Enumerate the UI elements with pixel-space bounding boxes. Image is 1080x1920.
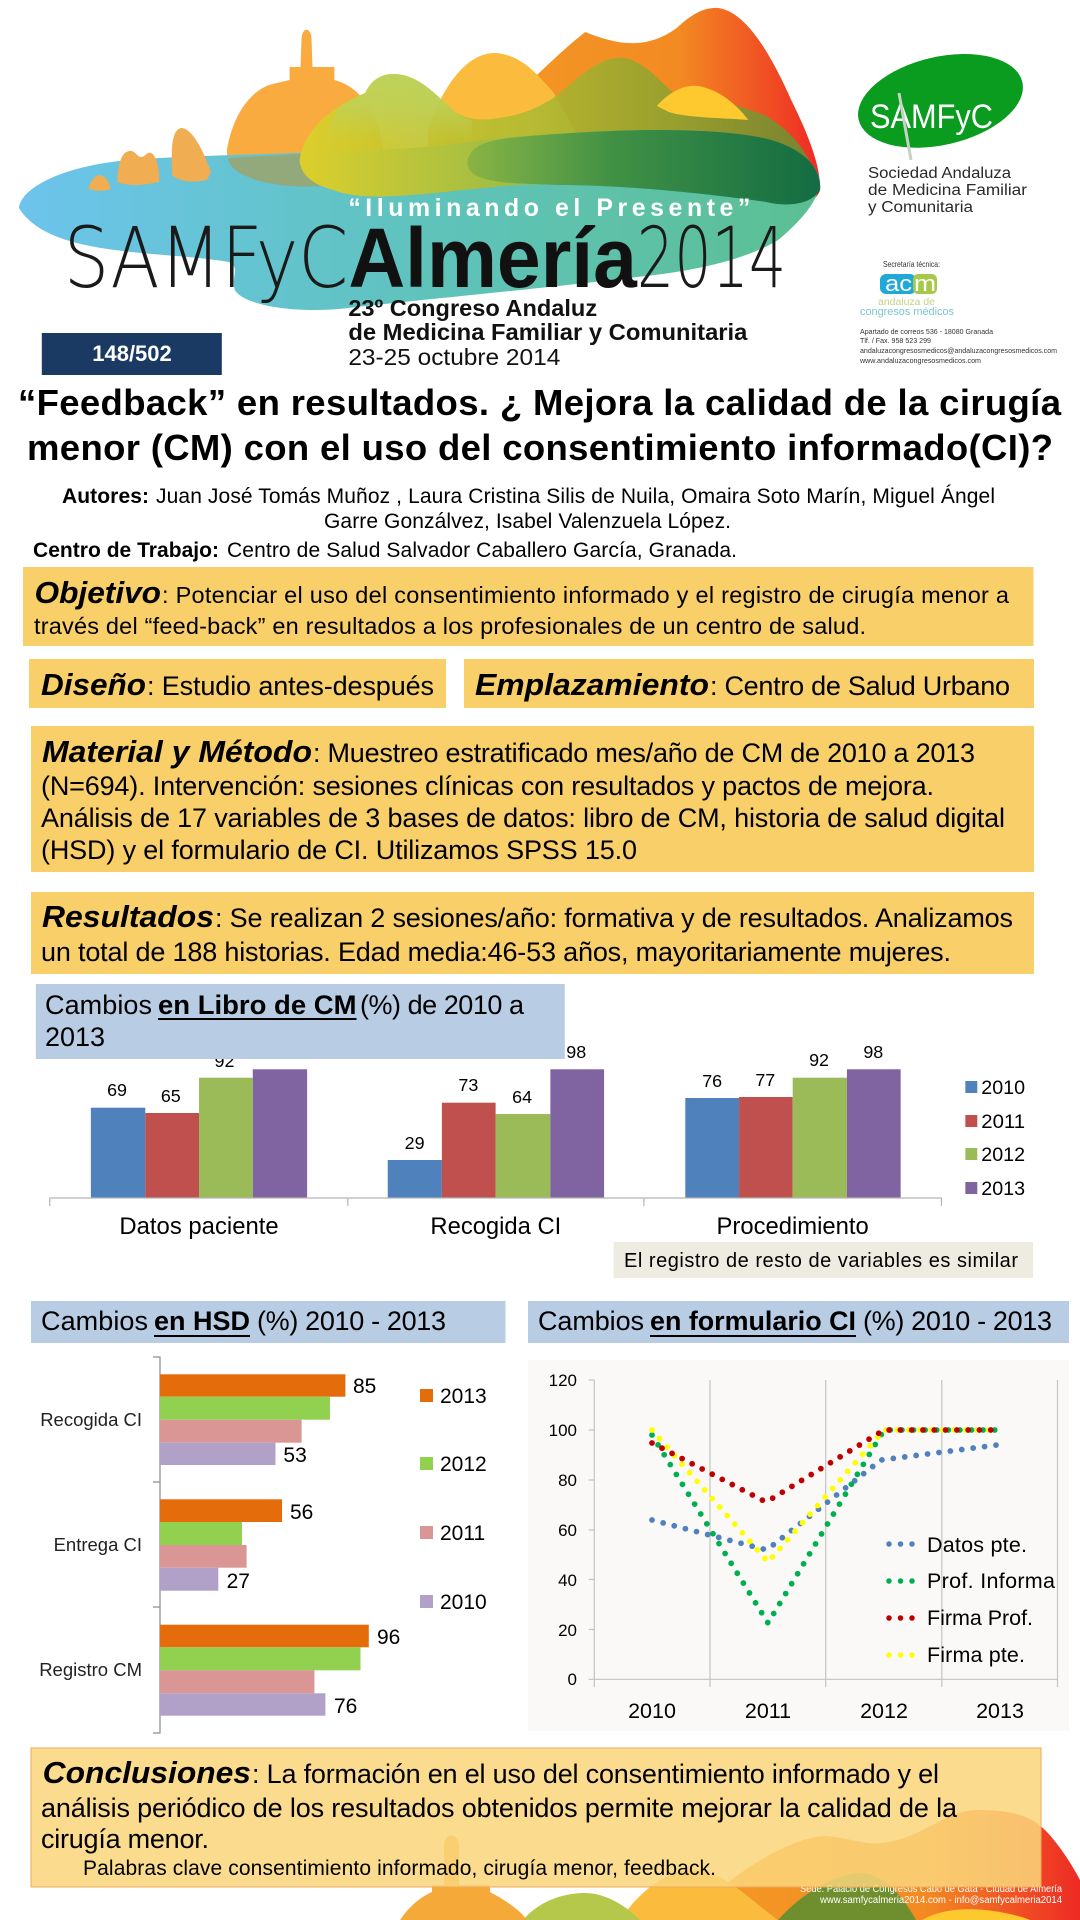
panel: emplazamiento <box>464 659 1034 708</box>
congress name: de Medicina Familiar y Comunitaria <box>348 319 748 345</box>
bars: procedimiento: 92 <box>809 1050 829 1070</box>
heading: cambios en HSD: en HSD <box>154 1306 250 1336</box>
workplace: Centro de Salud Salvador Caballero García, Granada. <box>227 539 737 562</box>
heading: cambios en libro de CM: 2013 <box>45 1022 105 1052</box>
heading: cambios en formulario CI: en formulario CI <box>650 1306 856 1336</box>
authors: Garre Gonzálvez, Isabel Valenzuela López. <box>324 510 731 533</box>
light green hilltop <box>323 74 472 140</box>
panel: material y metodo: : Muestreo estratificado mes/año de CM de 2010 a 2013 <box>313 738 975 768</box>
legend: 2012 <box>440 1453 487 1476</box>
y axis labels: 120 <box>549 1371 577 1390</box>
header: congress logo <box>19 8 820 370</box>
panel: conclusiones: : La formación en el uso del consentimiento informado y el <box>252 1759 939 1789</box>
legend: 2013 <box>981 1178 1025 1200</box>
heading: cambios en libro de CM: Cambios <box>45 990 152 1020</box>
bars: datos paciente <box>91 1051 307 1198</box>
authors: Juan José Tomás Muñoz , Laura Cristina Silis de Nuila, Omaira Soto Marín, Miguel Ángel <box>156 485 995 508</box>
workplace: Centro de Trabajo: <box>33 539 219 562</box>
bar chart: HSD <box>39 1357 487 1733</box>
slogan: “Iluminando el Presente” <box>348 194 750 222</box>
legend: 2013 <box>440 1385 487 1408</box>
panel: material y metodo <box>31 726 1034 872</box>
secretaria tecnica block: andaluzacongresosmedicos@andaluzacongresosmedicos.com <box>860 346 1057 355</box>
category labels: Recogida CI <box>40 1409 142 1430</box>
footer decoration: congress landscape <box>400 1810 1080 1920</box>
heading: cambios en libro de CM: en Libro de CM <box>158 990 356 1020</box>
legend: Datos pte. <box>927 1533 1027 1557</box>
category labels <box>39 1409 142 1680</box>
bars: datos paciente: 69 <box>107 1080 127 1100</box>
castle hill <box>227 30 388 185</box>
y axis labels: 80 <box>558 1471 577 1490</box>
yellow-orange hump <box>428 53 597 170</box>
bars: recogida CI <box>388 1042 604 1198</box>
bars: recogida CI: 64 <box>512 1087 532 1107</box>
congress name: 23-25 octubre 2014 <box>348 344 561 370</box>
legend: 2011 <box>440 1522 485 1545</box>
panel: resultados: un total de 188 historias. Edad media:46-53 años, mayoritariamente mujeres. <box>41 937 951 967</box>
congress name: 23º Congreso Andaluz <box>348 295 597 321</box>
footer venue text <box>800 1884 1062 1906</box>
panel: resultados: : Se realizan 2 sesiones/año: formativa y de resultados. Analizamos <box>215 903 1013 933</box>
panel: diseno <box>29 659 446 708</box>
authors <box>62 485 995 533</box>
panel: conclusiones: Palabras clave consentimiento informado, cirugía menor, feedback. <box>83 1857 716 1880</box>
secretaria tecnica block: andaluza de <box>878 297 935 308</box>
y axis labels: 40 <box>558 1571 577 1590</box>
panel: material y metodo: Análisis de 17 variables de 3 bases de datos: libro de CM, historia de salud digital <box>41 803 1005 833</box>
legend <box>965 1077 1025 1200</box>
panel: conclusiones: análisis periódico de los resultados obtenidos permite mejorar la calidad de la <box>41 1793 958 1823</box>
line chart: formulario CI <box>528 1360 1069 1731</box>
panel: diseno: : Estudio antes-después <box>147 671 434 701</box>
x axis labels <box>628 1699 1024 1723</box>
bars: recogida CI <box>160 1374 376 1467</box>
bars: datos paciente: 92 <box>215 1051 234 1071</box>
x axis labels: 2012 <box>860 1699 908 1723</box>
bars: recogida CI: 73 <box>458 1075 478 1095</box>
panel: objetivo: través del “feed-back” en resultados a los profesionales de un centro de salud. <box>34 613 866 639</box>
note: resto de variables: El registro de resto de variables es similar <box>624 1250 1018 1272</box>
series: datos pte <box>652 1445 997 1549</box>
category labels: Procedimiento <box>717 1213 869 1240</box>
yellow peak <box>657 86 748 120</box>
panel: conclusiones: Conclusiones <box>43 1755 251 1790</box>
bars: entrega CI: 27 <box>227 1570 250 1593</box>
abstract number badge <box>42 333 222 375</box>
note: resto de variables <box>614 1242 1033 1278</box>
bars: procedimiento: 76 <box>702 1071 722 1091</box>
authors: Autores: <box>62 485 149 508</box>
x axis labels: 2010 <box>628 1699 676 1723</box>
panel: conclusiones <box>31 1748 1041 1887</box>
bars: procedimiento <box>685 1042 901 1198</box>
category labels: Recogida CI <box>430 1213 561 1240</box>
legend: Firma Prof. <box>927 1606 1033 1630</box>
legend <box>420 1385 487 1614</box>
bars: datos paciente: 65 <box>161 1086 181 1106</box>
SAMFyC society logo: de Medicina Familiar <box>868 182 1027 199</box>
heading: cambios en HSD: Cambios <box>41 1306 148 1336</box>
heading: cambios en formulario CI: (%) 2010 - 2013 <box>863 1306 1052 1336</box>
bars: recogida CI: 85 <box>353 1375 376 1398</box>
bars: entrega CI <box>160 1499 313 1593</box>
bar chart: libro de CM <box>50 1042 1025 1240</box>
y axis labels: 100 <box>549 1421 577 1440</box>
bars: registro CM: 76 <box>334 1695 357 1718</box>
lake <box>19 130 820 310</box>
panel: material y metodo: (HSD) y el formulario de CI. Utilizamos SPSS 15.0 <box>41 835 637 865</box>
panel: emplazamiento: : Centro de Salud Urbano <box>710 671 1010 701</box>
legend: 2011 <box>981 1111 1025 1133</box>
secretaria tecnica block <box>859 260 1057 365</box>
heading: cambios en HSD <box>31 1301 506 1343</box>
bars: procedimiento: 77 <box>755 1070 775 1090</box>
x axis labels: 2013 <box>976 1699 1024 1723</box>
panel: resultados <box>31 892 1034 974</box>
bars: registro CM <box>160 1625 400 1718</box>
dark green band <box>467 130 820 204</box>
panel: conclusiones: cirugía menor. <box>41 1824 209 1854</box>
secretaria tecnica block: Apartado de correos 536 - 18080 Granada <box>860 327 994 336</box>
heading: cambios en formulario CI: Cambios <box>538 1306 644 1336</box>
SAMFyC society logo: SAMFyC <box>870 98 993 136</box>
bars: recogida CI: 29 <box>405 1133 425 1153</box>
panel: emplazamiento: Emplazamiento <box>475 667 709 702</box>
series: firma pte <box>652 1430 997 1562</box>
panel: resultados: Resultados <box>42 899 214 934</box>
SAMFyC wordmark: SAMFyC <box>64 209 348 307</box>
heading: cambios en libro de CM <box>36 984 565 1059</box>
congress name <box>348 295 748 370</box>
SAMFyC society logo: y Comunitaria <box>868 199 973 216</box>
SAMFyC society logo <box>849 39 1032 216</box>
secretaria tecnica block: congresos médicos <box>860 306 954 318</box>
bars: procedimiento: 98 <box>863 1042 883 1062</box>
title: menor (CM) con el uso del consentimiento informado(CI)? <box>27 427 1053 468</box>
series: firma prof <box>652 1430 997 1501</box>
title <box>18 382 1062 468</box>
legend: Firma pte. <box>927 1643 1025 1667</box>
legend: 2010 <box>981 1077 1025 1099</box>
panel: objetivo: Objetivo <box>34 575 161 610</box>
abstract number badge: 148/502 <box>92 341 172 366</box>
panel: material y metodo: Material y Método <box>42 734 312 769</box>
green blob <box>300 58 816 202</box>
y axis labels: 0 <box>568 1670 577 1689</box>
castle reflection over lake <box>228 153 323 187</box>
bars: entrega CI: 56 <box>290 1501 313 1524</box>
category labels <box>119 1213 869 1240</box>
category labels: Datos paciente <box>119 1213 279 1240</box>
series: prof informa <box>652 1430 997 1623</box>
y axis labels: 20 <box>558 1621 577 1640</box>
legend: Prof. Informa <box>927 1569 1055 1593</box>
rocks <box>89 128 211 191</box>
bars: registro CM: 96 <box>377 1626 400 1649</box>
footer venue text: www.samfycalmeria2014.com - info@samfycalmeria2014 <box>819 1895 1062 1906</box>
Almería wordmark: Almería <box>348 211 638 305</box>
x axis labels: 2011 <box>745 1699 791 1723</box>
legend: 2010 <box>440 1591 487 1614</box>
secretaria tecnica block: ac <box>885 271 912 296</box>
y axis labels: 60 <box>558 1521 577 1540</box>
panel: material y metodo: (N=694). Intervención: sesiones clínicas con resultados y pactos de mejora. <box>41 771 934 801</box>
red-orange mountain <box>468 8 820 203</box>
SAMFyC society logo: Sociedad Andaluza <box>868 165 1011 182</box>
legend: 2012 <box>981 1144 1025 1166</box>
panel: objetivo <box>23 567 1034 646</box>
category labels: Registro CM <box>39 1659 142 1680</box>
heading: cambios en HSD: (%) 2010 - 2013 <box>257 1306 446 1336</box>
heading: cambios en libro de CM: (%) de 2010 a <box>360 990 525 1020</box>
secretaria tecnica block: Secretaría técnica: <box>883 260 940 269</box>
2014 wordmark: 2014 <box>637 209 786 307</box>
panel: diseno: Diseño <box>41 667 146 702</box>
secretaria tecnica block: m <box>914 271 936 296</box>
panel: objetivo: : Potenciar el uso del consentimiento informado y el registro de cirugía menor a <box>162 582 1010 608</box>
secretaria tecnica block: www.andaluzacongresosmedicos.com <box>859 356 981 365</box>
y axis labels <box>549 1371 577 1689</box>
category labels: Entrega CI <box>54 1534 142 1555</box>
secretaria tecnica block: Tlf. / Fax. 958 523 299 <box>860 336 931 345</box>
bars: recogida CI: 98 <box>566 1042 586 1062</box>
title: “Feedback” en resultados. ¿ Mejora la calidad de la cirugía <box>18 382 1062 423</box>
heading: cambios en formulario CI <box>528 1301 1069 1343</box>
footer venue text: Sede: Palacio de Congresos Cabo de Gata - Ciudad de Almería <box>800 1884 1062 1895</box>
legend <box>889 1533 1055 1667</box>
bars: recogida CI: 53 <box>283 1444 307 1467</box>
